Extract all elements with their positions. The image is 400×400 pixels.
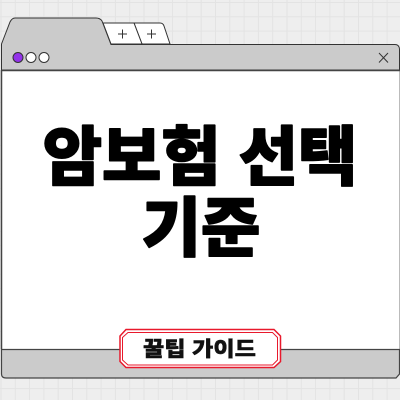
window control: white dot 1	[26, 52, 36, 62]
title	[43, 122, 357, 265]
icon: close X	[379, 53, 388, 62]
window content area	[2, 70, 400, 350]
browser tab: plus tab 1	[103, 23, 142, 44]
bottom bar	[2, 350, 400, 378]
browser window frame	[2, 18, 400, 70]
window control: purple dot	[13, 52, 23, 62]
browser tab: plus tab 2	[134, 23, 170, 44]
title: 기준	[142, 193, 260, 265]
badge label: 꿀팁 가이드	[143, 338, 256, 361]
badge: tip guide	[120, 330, 280, 368]
title: 암보험 선택	[43, 122, 357, 194]
window control: white dot 2	[39, 52, 49, 62]
